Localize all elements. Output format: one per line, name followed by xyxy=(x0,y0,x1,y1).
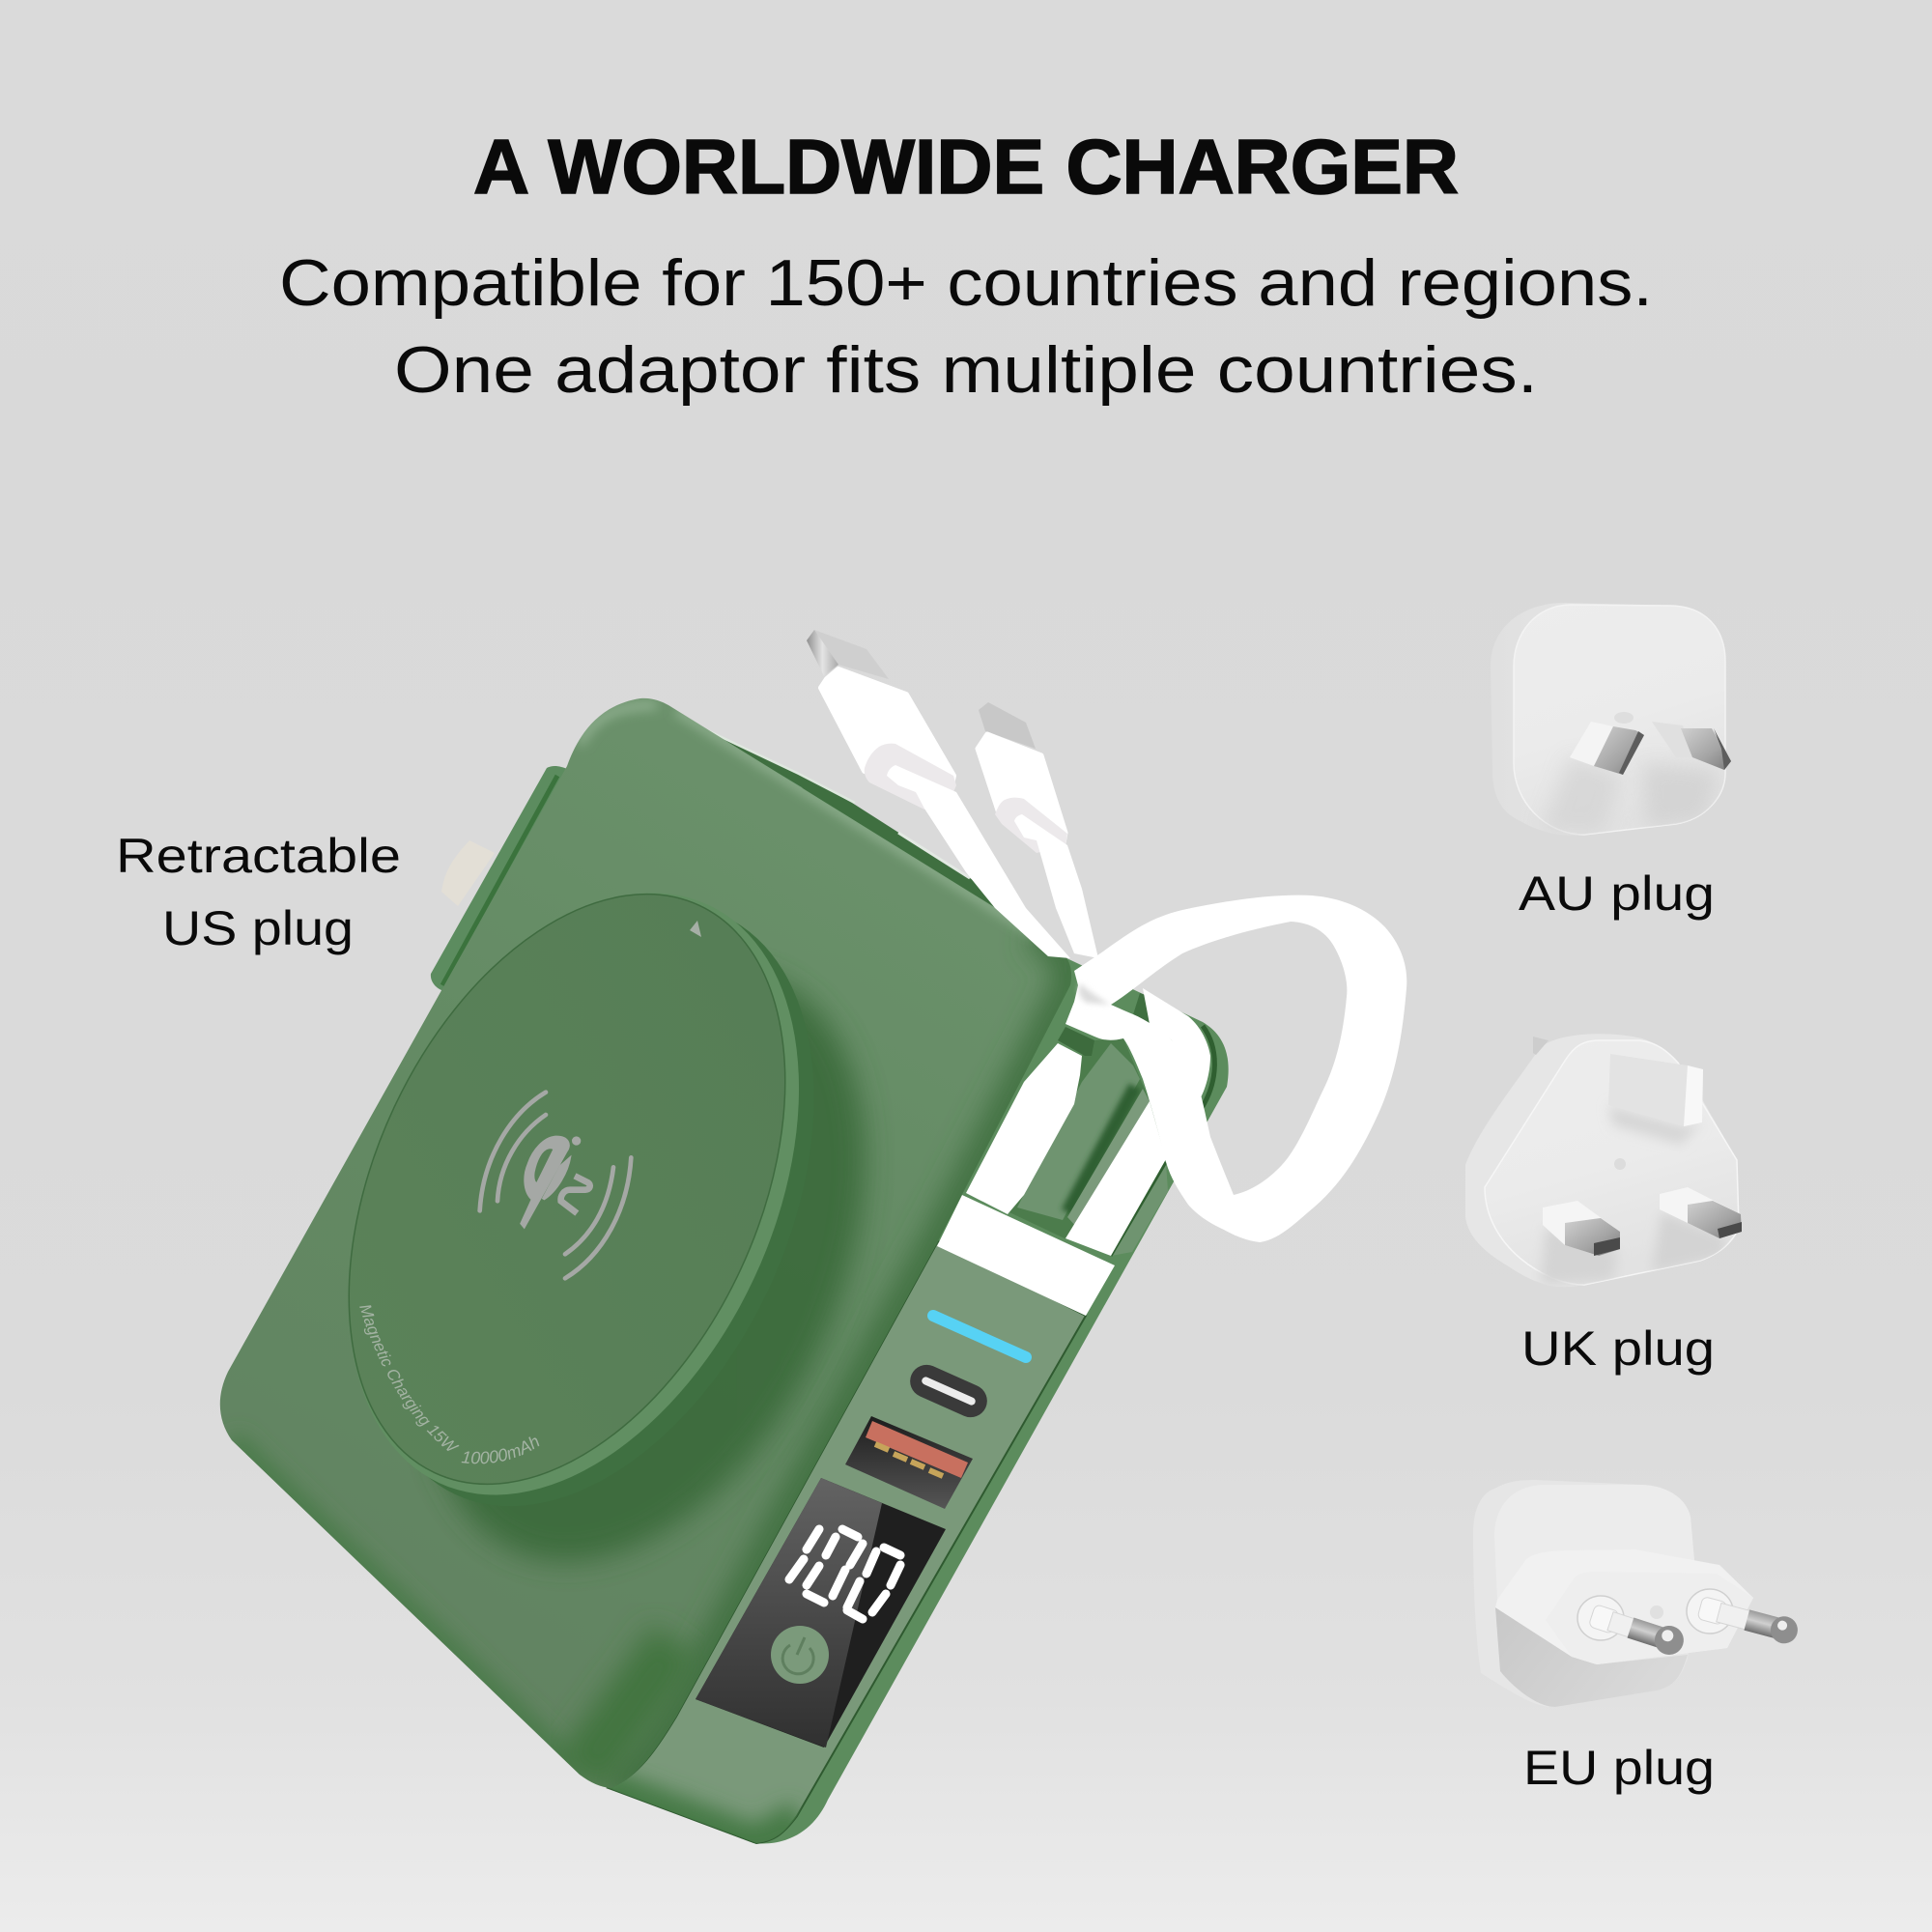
icon: EU plug xyxy=(1473,1480,1801,1707)
label: AU plug: AU plug xyxy=(1519,867,1715,921)
label: EU plug: EU plug xyxy=(1523,1741,1715,1795)
USB-A port xyxy=(845,1416,973,1509)
cable ribbon loop xyxy=(1065,895,1406,1242)
cable compartment xyxy=(1009,993,1214,1256)
disc small print: Magnetic Charging 15W xyxy=(359,1305,460,1451)
panel bottom shading xyxy=(599,1787,802,1847)
title: A WORLDWIDE CHARGER xyxy=(473,124,1459,210)
subtitle text: One adaptor fits multiple countries. xyxy=(394,333,1538,407)
retractable US plug blade xyxy=(441,840,495,906)
retracted ribbon left xyxy=(966,1043,1082,1214)
retracted ribbon right xyxy=(1065,1101,1166,1256)
back ribbon strand xyxy=(1143,988,1210,1101)
icon: AU plug xyxy=(1491,603,1731,836)
disc alignment marker xyxy=(690,921,701,937)
USB-C port xyxy=(905,1359,992,1423)
face shading xyxy=(232,705,1071,1788)
top edge pocket xyxy=(705,730,1024,918)
qi2 logo xyxy=(480,1093,631,1278)
wireless charging disc rim xyxy=(259,821,903,1577)
side of body xyxy=(609,956,1229,1843)
wireless charging disc xyxy=(262,825,872,1553)
front face of body xyxy=(220,698,1071,1788)
knot shading xyxy=(1079,983,1111,1005)
Lightning cable connector xyxy=(978,702,1098,958)
subtitle text xyxy=(279,246,1653,407)
plug bracket xyxy=(431,766,570,993)
power button xyxy=(771,1626,829,1684)
LED indicator xyxy=(933,1316,1026,1357)
label: UK plug: UK plug xyxy=(1521,1321,1715,1376)
side panel xyxy=(609,1241,1086,1843)
icon: UK plug xyxy=(1465,1034,1742,1287)
subtitle text: Compatible for 150+ countries and regions. xyxy=(279,246,1653,320)
battery display xyxy=(696,1478,946,1747)
label: retractable US plug: Retractable xyxy=(116,829,401,883)
disc small print xyxy=(359,1305,539,1464)
USB-C cable connector xyxy=(807,630,1070,958)
power bank xyxy=(220,630,1406,1844)
label: retractable US plug xyxy=(116,829,401,955)
label: retractable US plug: US plug xyxy=(162,901,354,955)
white cable band xyxy=(937,1195,1115,1316)
display digits 100 xyxy=(789,1529,900,1619)
disc small print: 10000mAh xyxy=(462,1436,539,1464)
